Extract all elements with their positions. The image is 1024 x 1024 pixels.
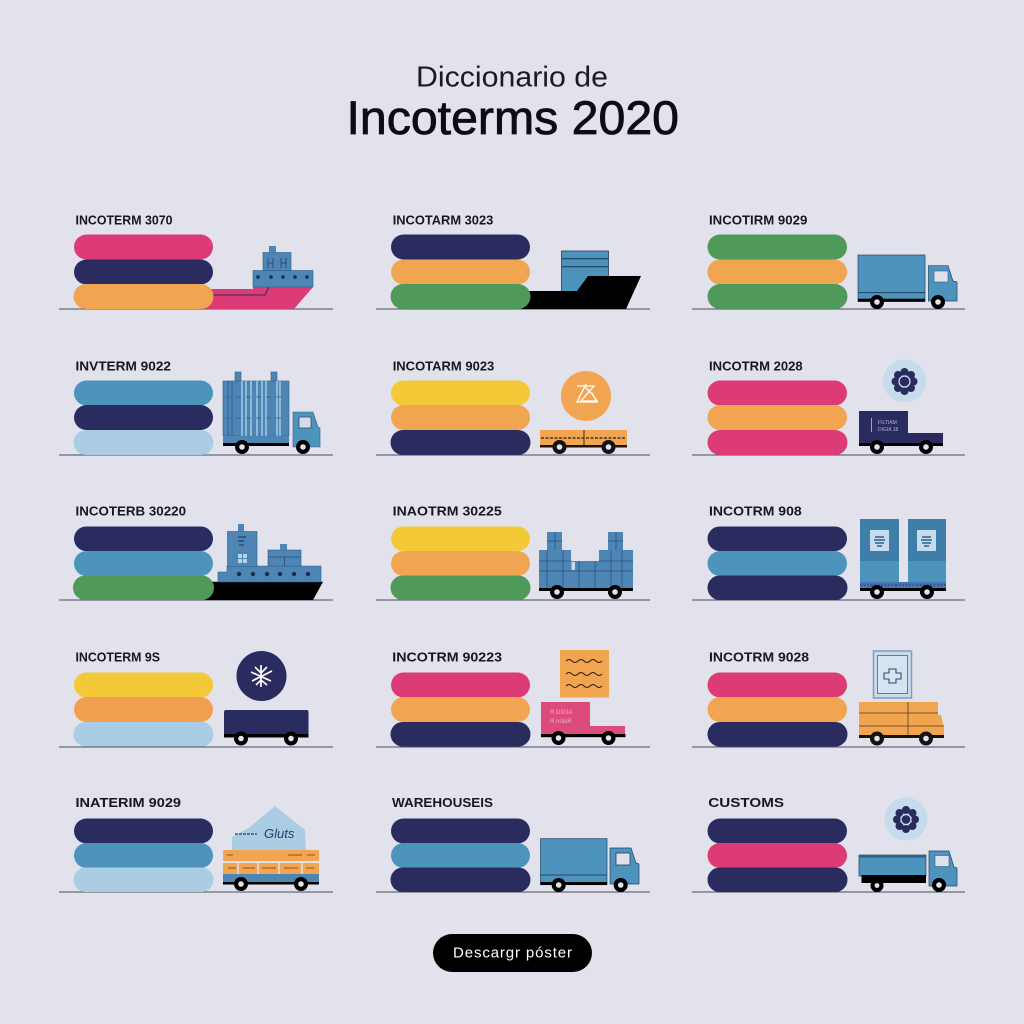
colour stack [708, 818, 848, 892]
colour stack [708, 380, 848, 455]
colour stack [74, 818, 214, 892]
icon: orange badge [561, 371, 611, 421]
icon: container truck [223, 372, 320, 454]
icon: pink truck [541, 702, 626, 745]
panel: row 1 column 2 [376, 212, 650, 309]
colour stack [74, 234, 214, 309]
panel: row 1 column 1 [59, 212, 333, 309]
icon: orange flatbed truck [540, 430, 627, 454]
icon: document note [560, 650, 609, 698]
icon: black ship with container [522, 251, 641, 309]
panel: customs [692, 795, 965, 892]
icon: pink ship [205, 246, 313, 309]
colour stack [390, 672, 530, 746]
icon: cargo ship [205, 524, 323, 600]
colour stack [390, 818, 530, 892]
panel: row 2 column 3 [692, 358, 965, 455]
label: CUSTOMS [708, 795, 784, 810]
colour stack [74, 380, 214, 455]
colour stack [74, 672, 214, 746]
icon: light badge with flower [883, 360, 926, 402]
label: INATERIM 9029 [76, 795, 181, 810]
panel: row 3 column 1 [59, 503, 333, 600]
panel: row 3 column 2 [376, 503, 650, 600]
icon: blue truck [540, 839, 639, 892]
icon: navy truck [859, 411, 943, 454]
label: INCOTRM 908 [709, 503, 802, 518]
download button: Descargr póster [453, 945, 572, 962]
label: INCOTARM 9023 [393, 358, 494, 373]
label: INCOTRM 9028 [709, 650, 809, 665]
label: INCOTERB 30220 [76, 503, 186, 518]
panel: row 2 column 2 [376, 358, 650, 455]
label: INVTERM 9022 [76, 358, 171, 373]
label: INCOTRM 2028 [709, 358, 803, 373]
icon: twin container truck [860, 519, 946, 599]
icon: pink truck: R DIGIA [550, 710, 572, 716]
label: INCOTIRM 9029 [709, 212, 807, 228]
title [346, 62, 679, 144]
title: Incoterms 2020 [346, 91, 679, 144]
colour stack [390, 526, 530, 600]
icon: navy truck: DIGIA 18 [878, 427, 899, 433]
icon: navy badge [236, 651, 286, 701]
icon: house cargo truck [223, 806, 319, 891]
icon: blue truck [858, 255, 957, 309]
icon: house cargo truck: Gluts [264, 826, 295, 841]
label: INAOTRM 30225 [393, 503, 502, 518]
panel: row 4 column 1 [59, 650, 333, 747]
panel: warehouses [376, 795, 650, 892]
icon: container stack truck [539, 532, 633, 599]
colour stack [390, 380, 530, 455]
label: INCOTARM 3023 [393, 212, 493, 228]
icon: pink truck: R ndiaR [550, 719, 572, 725]
icon: light badge with flower [884, 798, 928, 840]
label: INCOTRM 90223 [392, 650, 502, 665]
title: Diccionario de [416, 62, 608, 94]
download button [433, 934, 592, 972]
panel: row 3 column 3 [692, 503, 965, 600]
icon: framed certificate [874, 651, 912, 698]
icon: tipper truck [859, 851, 957, 892]
label: INCOTERM 3070 [76, 212, 172, 228]
panel: row 4 column 2 [376, 650, 650, 747]
icon: navy truck: FILTIAM [878, 420, 897, 426]
icon: navy van [224, 710, 308, 746]
colour stack [73, 526, 214, 600]
panel: row 1 column 3 [692, 212, 965, 309]
panel: row 4 column 3 [692, 650, 965, 747]
colour stack [390, 234, 530, 309]
colour stack [708, 526, 848, 600]
colour stack [708, 234, 848, 309]
colour stack [708, 672, 848, 746]
panel: row 5 column 1 [59, 795, 333, 892]
panel: row 2 column 1 [59, 358, 333, 455]
label: INCOTERM 9S [76, 650, 160, 665]
label: WAREHOUSEIS [392, 795, 493, 810]
icon: orange box truck [859, 702, 944, 746]
